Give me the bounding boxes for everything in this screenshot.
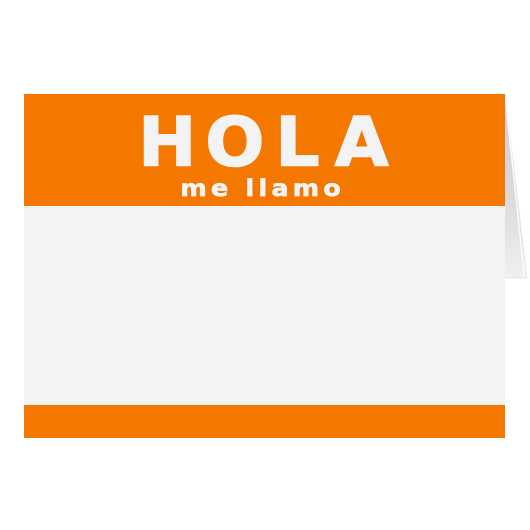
subheading: me llamo: me llamo: [180, 175, 345, 202]
heading: HOLA: HOLA: [138, 103, 389, 182]
card back fold: [505, 94, 527, 278]
bottom orange band: [24, 405, 505, 438]
top orange band: [24, 94, 505, 206]
card front panel: [24, 94, 505, 438]
